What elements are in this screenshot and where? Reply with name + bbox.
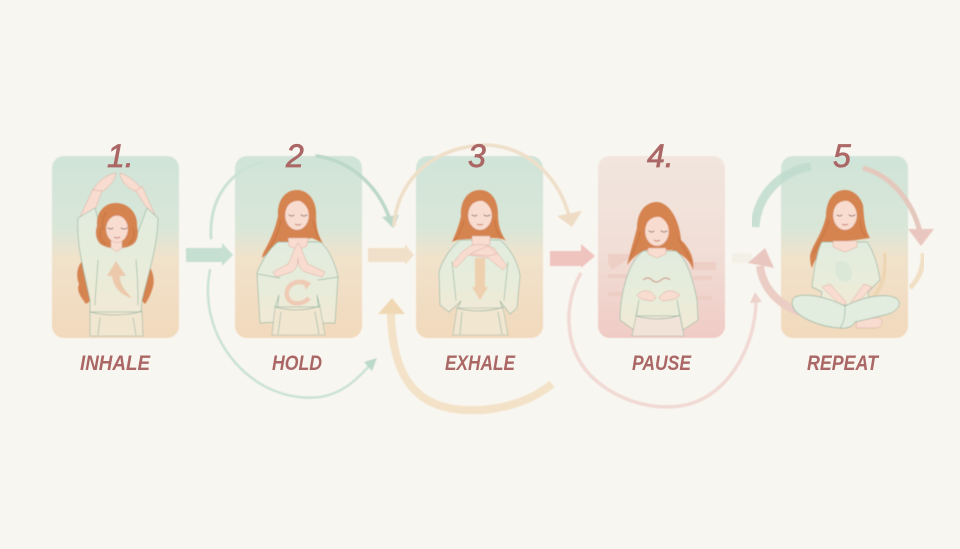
label: inhale: INHALE xyxy=(80,352,151,375)
illustration: woman seated cross-legged xyxy=(792,190,899,328)
arrow: step 1 to 2 xyxy=(186,243,233,266)
icon: pink stripes behind figure xyxy=(608,254,716,300)
arrow: step 4 to 5 faint xyxy=(732,253,752,263)
illustration: woman holding breath with palms together xyxy=(257,190,338,335)
number 1: 1. xyxy=(107,138,134,174)
arrow: green loop from card 2 to card 3 below xyxy=(208,162,377,398)
arrow: green curve from card 2 top xyxy=(317,156,399,228)
icon: curved up arrow xyxy=(107,261,132,298)
label: pause: PAUSE xyxy=(632,352,692,375)
arrow: card 5 lower pink arc xyxy=(748,248,800,312)
arrow: card 5 green arc xyxy=(755,166,811,227)
label: hold: HOLD xyxy=(272,352,322,375)
arrow: card 5 pink arc xyxy=(863,168,934,246)
icon: down arrow xyxy=(472,258,488,300)
panel: card 2 hold xyxy=(235,156,362,338)
arrow: peach arc over card 3 xyxy=(394,145,582,227)
panel: card 4 pause xyxy=(598,156,725,338)
number 3: 3 xyxy=(468,138,486,174)
panel: card 3 exhale xyxy=(416,156,543,338)
arrow: peach arc under card 3 xyxy=(378,298,552,410)
number 4: 4. xyxy=(647,138,674,174)
arrow: card 5 peach arc xyxy=(910,253,923,288)
illustration: woman pausing with hands at belly xyxy=(608,202,716,336)
label: exhale: EXHALE xyxy=(445,352,516,375)
number 5: 5 xyxy=(833,138,851,174)
icon: circular hold arrow xyxy=(287,279,311,303)
illustration: woman exhaling with hands on chest xyxy=(439,190,520,335)
arrow: card 5 inner peach band xyxy=(870,253,885,300)
illustration: woman inhaling with raised arms xyxy=(77,173,158,336)
label: repeat: REPEAT xyxy=(807,352,880,375)
arrow: pink arc under card 4 xyxy=(569,273,762,407)
arrow: step 3 to 4 xyxy=(550,244,595,268)
number 2: 2 xyxy=(285,138,304,174)
panel: card 1 inhale xyxy=(52,156,179,338)
panel: card 5 repeat xyxy=(781,156,908,338)
arrow: step 2 to 3 xyxy=(368,244,414,265)
